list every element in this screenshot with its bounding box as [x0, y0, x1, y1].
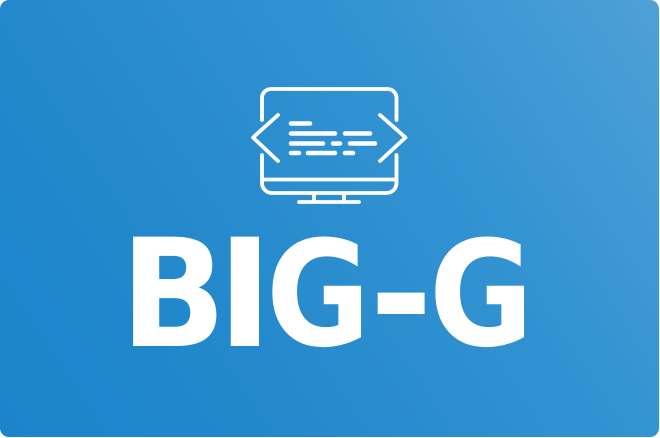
title: BIG-G: B	[120, 208, 226, 382]
title: BIG-G	[120, 207, 533, 382]
title: BIG-G: -	[369, 207, 433, 382]
title: BIG-G: G	[266, 211, 370, 380]
title: BIG-G: G	[429, 211, 533, 380]
icon: monitor with code	[253, 89, 406, 202]
title: BIG-G: I	[217, 208, 273, 382]
